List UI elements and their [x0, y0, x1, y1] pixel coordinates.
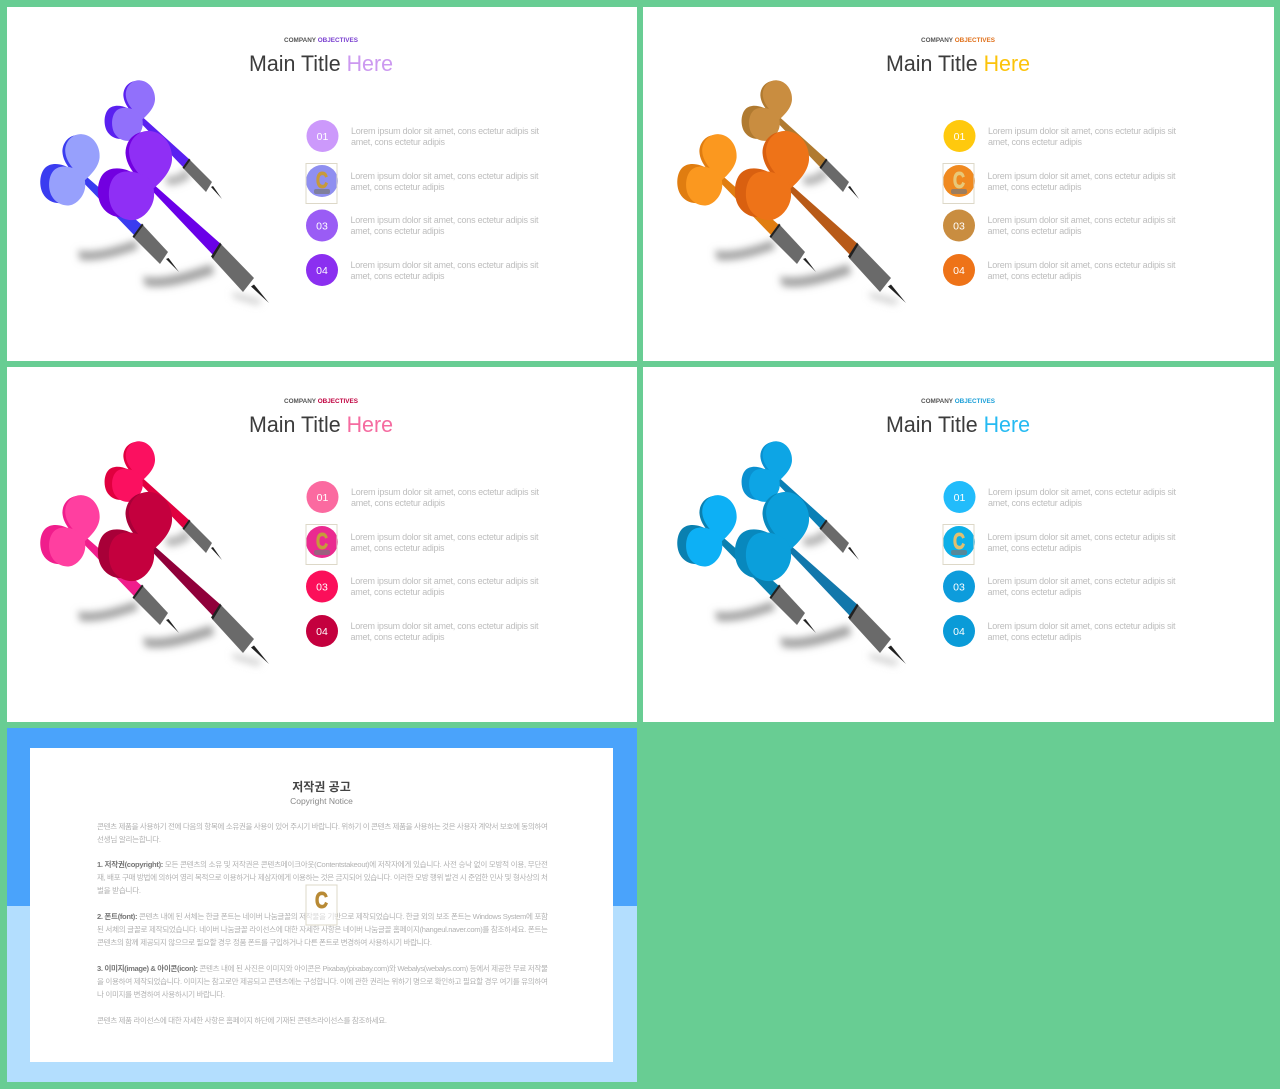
panel: pink dart slide: [7, 367, 637, 722]
item 04: 04: [953, 626, 965, 638]
item 02 with watermark: Lorem ipsum dolor sit amet, cons ectetur adipis sit: [350, 532, 539, 542]
item 01: amet, cons ectetur adipis: [988, 498, 1082, 508]
copyright subheading: Copyright Notice: [290, 796, 353, 806]
copyright body text: [97, 821, 548, 1025]
illustration: three darts: [677, 80, 906, 305]
kicker: COMPANY OBJECTIVES: [284, 37, 358, 44]
title: Main Title Here: [886, 412, 1030, 437]
item 02 with watermark: [943, 164, 1176, 204]
item 01: Lorem ipsum dolor sit amet, cons ectetur adipis sit: [351, 126, 539, 136]
item 02 with watermark: C: [953, 167, 965, 193]
item 04: Lorem ipsum dolor sit amet, cons ectetur adipis sit: [350, 621, 539, 631]
item 04: Lorem ipsum dolor sit amet, cons ectetur adipis sit: [988, 260, 1176, 270]
item 01: amet, cons ectetur adipis: [351, 498, 446, 508]
item 04: Lorem ipsum dolor sit amet, cons ectetur adipis sit: [350, 260, 539, 270]
item 03: [943, 210, 1176, 242]
copyright body text: 벌을 받습니다.: [97, 885, 141, 895]
item 02 with watermark: amet, cons ectetur adipis: [988, 182, 1082, 192]
item 03: Lorem ipsum dolor sit amet, cons ectetur adipis sit: [988, 215, 1176, 225]
copyright body text: 재, 배포 구매 방법에 의하여 영리 목적으로 이용하거나 제삼자에게 이용하는 것은 금지되어 있습니다. 이러한 모방 행위 발견 시 준엄한 민사 및 형사상의 처: [97, 872, 548, 882]
item 02 with watermark: C: [316, 167, 328, 193]
item 02 with watermark: [306, 164, 539, 204]
item 01: Lorem ipsum dolor sit amet, cons ectetur adipis sit: [988, 487, 1176, 497]
item 03: Lorem ipsum dolor sit amet, cons ectetur adipis sit: [988, 576, 1176, 586]
title: Main Title Here: [249, 51, 393, 76]
copyright body text: 나 이미지를 변경하여 사용하시기 바랍니다.: [97, 989, 225, 999]
item 01: 01: [954, 131, 965, 143]
item 03: amet, cons ectetur adipis: [988, 587, 1082, 597]
panel: purple dart slide: [7, 7, 637, 361]
item 02 with watermark: amet, cons ectetur adipis: [350, 543, 445, 553]
item 01: 01: [954, 492, 965, 504]
item 04: amet, cons ectetur adipis: [350, 271, 445, 281]
item 04: amet, cons ectetur adipis: [988, 271, 1082, 281]
item 01: amet, cons ectetur adipis: [351, 137, 446, 147]
copyright body text: 된 서체의 글꼴로 제작되었습니다. 네이버 나눔글꼴 라이선스에 대한 자세한 사항은 네이버 나눔글꼴 홈페이지(hangeul.naver.com)를 참조하세요. 폰트는: [97, 924, 548, 934]
item 01: [306, 481, 539, 513]
item 04: amet, cons ectetur adipis: [988, 632, 1082, 642]
item 03: Lorem ipsum dolor sit amet, cons ectetur adipis sit: [350, 215, 539, 225]
item 04: 04: [953, 265, 965, 277]
illustration: three darts: [40, 441, 269, 666]
item 04: [306, 615, 539, 647]
item 04: 04: [316, 265, 328, 277]
item 02 with watermark: Lorem ipsum dolor sit amet, cons ectetur adipis sit: [350, 171, 539, 181]
item 02 with watermark: [306, 524, 539, 564]
item 02 with watermark: amet, cons ectetur adipis: [988, 543, 1082, 553]
copyright body text: 콘텐츠 제품 라이선스에 대한 자세한 사항은 홈페이지 하단에 기재된 콘텐츠라이선스를 참조하세요.: [97, 1015, 387, 1025]
copyright body text: 1. 저작권(copyright): 모든 콘텐츠의 소유 및 저작권은 콘텐츠메이크아웃(Contentstakeout)에 저작자에게 있습니다. 사전 승낙 없이 모방적 이용, 무단전: [97, 859, 548, 869]
item 01: 01: [317, 131, 328, 143]
copyright body text: 을 이용하여 제작되었습니다. 이미지는 참고로만 제공되고 콘텐츠에는 구성합니다. 이에 관한 권리는 위하기 명으로 확인하고 필요할 경우 여기를 유의하여: [97, 976, 548, 986]
item 03: 03: [953, 220, 965, 232]
panel: copyright notice: [7, 728, 637, 1082]
watermark stamp: C: [315, 887, 328, 913]
kicker: COMPANY OBJECTIVES: [284, 398, 358, 405]
item 03: amet, cons ectetur adipis: [988, 226, 1082, 236]
item 01: [944, 120, 1176, 152]
item 03: 03: [316, 582, 328, 594]
item 02 with watermark: C: [953, 528, 965, 554]
item 04: [306, 254, 539, 286]
copyright body text: 2. 폰트(font): 콘텐츠 내에 된 서체는 한글 폰트는 네이버 나눔글꼴의 저작물을 기반으로 제작되었습니다. 한글 외의 보조 폰트는 Windows System에 포함: [97, 911, 548, 921]
item 04: amet, cons ectetur adipis: [350, 632, 445, 642]
copyright body text: 3. 이미지(image) & 아이콘(icon): 콘텐츠 내에 된 사진은 이미지와 아이콘은 Pixabay(pixabay.com)와 Webalys(webalys.com) 등에서 제공한 무료 저작물: [97, 963, 548, 973]
item 02 with watermark: [943, 524, 1176, 564]
copyright body text: 선생님 알리는합니다.: [97, 834, 161, 844]
item 04: [943, 615, 1176, 647]
item 04: Lorem ipsum dolor sit amet, cons ectetur adipis sit: [988, 621, 1176, 631]
title: Main Title Here: [249, 412, 393, 437]
item 03: amet, cons ectetur adipis: [350, 226, 445, 236]
item 01: [306, 120, 539, 152]
item 01: Lorem ipsum dolor sit amet, cons ectetur adipis sit: [351, 487, 539, 497]
item 02 with watermark: amet, cons ectetur adipis: [350, 182, 445, 192]
title: Main Title Here: [886, 51, 1030, 76]
item 03: [306, 570, 539, 602]
watermark stamp: [306, 885, 337, 925]
item 01: amet, cons ectetur adipis: [988, 137, 1082, 147]
illustration: three darts: [677, 441, 906, 666]
item 02 with watermark: Lorem ipsum dolor sit amet, cons ectetur adipis sit: [988, 532, 1176, 542]
item 03: 03: [953, 582, 965, 594]
copyright body text: 콘텐츠의 함께 제공되지 않으므로 필요할 경우 정품 폰트를 구입하거나 다른 폰트로 변경하여 사용하시기 바랍니다.: [97, 937, 432, 947]
item 01: Lorem ipsum dolor sit amet, cons ectetur adipis sit: [988, 126, 1176, 136]
panel: blue dart slide: [643, 367, 1274, 722]
item 03: amet, cons ectetur adipis: [350, 587, 445, 597]
item 01: 01: [317, 492, 328, 504]
item 01: [944, 481, 1176, 513]
copyright body text: 콘텐츠 제품을 사용하기 전에 다음의 항목에 소유권을 사용이 있어 주시기 바랍니다. 위하기 이 콘텐츠 제품을 사용하는 것은 사용자 계약서 보호에 동의하여: [97, 821, 548, 831]
panel: orange dart slide: [643, 7, 1274, 361]
illustration: three darts: [40, 80, 269, 305]
item 03: 03: [316, 220, 328, 232]
item 02 with watermark: C: [316, 528, 328, 554]
item 04: 04: [316, 626, 328, 638]
kicker: COMPANY OBJECTIVES: [921, 37, 995, 44]
kicker: COMPANY OBJECTIVES: [921, 398, 995, 405]
item 02 with watermark: Lorem ipsum dolor sit amet, cons ectetur adipis sit: [988, 171, 1176, 181]
item 03: [306, 210, 539, 242]
item 03: Lorem ipsum dolor sit amet, cons ectetur adipis sit: [350, 576, 539, 586]
item 03: [943, 570, 1176, 602]
copyright heading: 저작권 공고: [292, 779, 351, 794]
item 04: [943, 254, 1176, 286]
